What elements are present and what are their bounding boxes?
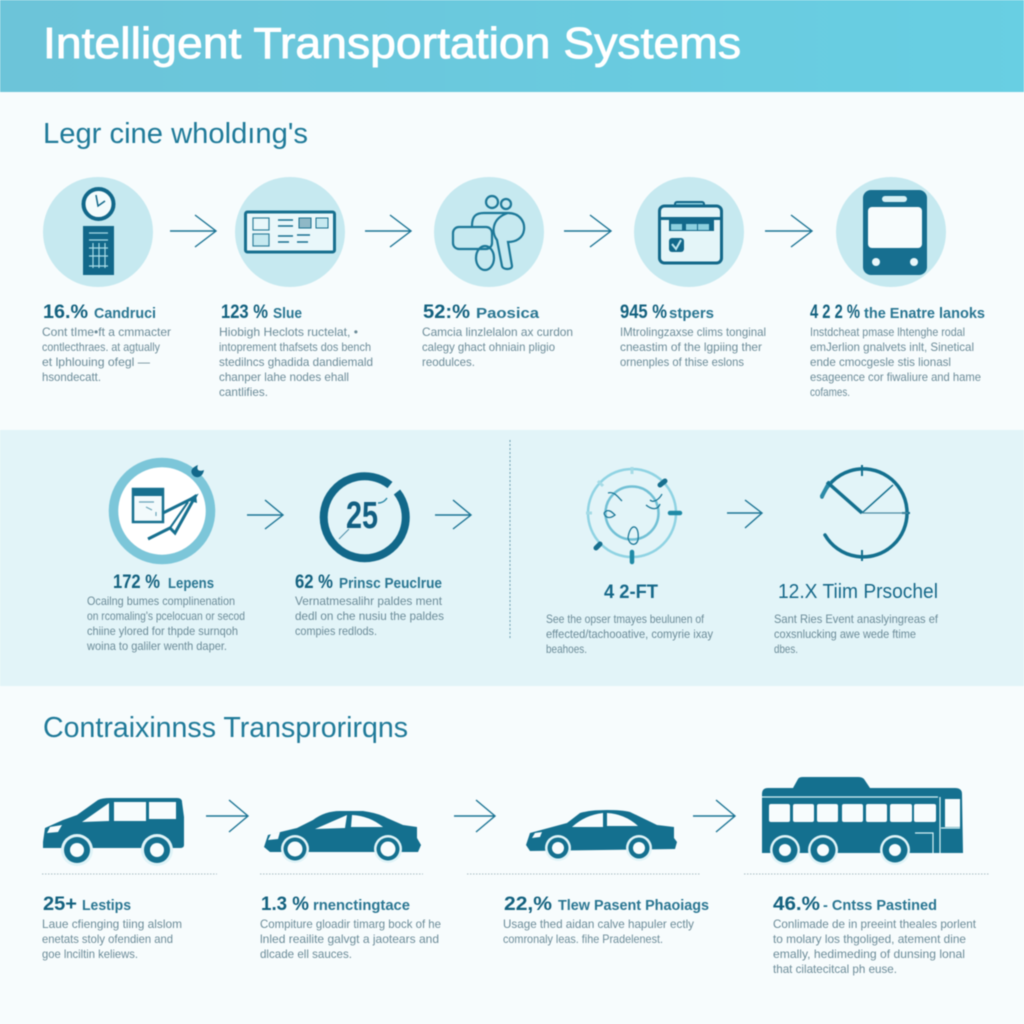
stat 3: reodulces.: [422, 355, 475, 369]
stat: left band 2: compies redlods.: [295, 624, 377, 638]
stat: right band 1: 4 2-FT: [604, 582, 658, 603]
stat: right band 2: dbes.: [774, 642, 798, 656]
icon: concentric target circles: [586, 467, 680, 562]
arrow: [365, 215, 411, 247]
stat: bus: that cilatecitcal ph euse.: [773, 962, 897, 976]
stat: sedan: Compiture gloadir timarg bock of he: [260, 917, 441, 931]
stat: left band 1: woina to galiler wenth daper.: [86, 639, 227, 653]
stat: sedan: 1.3 %: [261, 894, 309, 915]
middle panel band: [0, 430, 1024, 686]
icon: progress ring 25: 25: [346, 495, 378, 537]
stat: right band 2: coxsnlucking awe wede ftime: [774, 627, 916, 641]
title: Intelligent Transportation Systems: [43, 19, 741, 68]
stat: sedan: lnled reailite galvgt a jaotears and: [260, 932, 439, 946]
stat 2: intoprement thafsets dos bench: [219, 340, 371, 354]
stat 5: emJerlion gnalvets inlt, Sinetical: [810, 340, 974, 354]
stat: right band 1: See the opser tmayes beulunen of: [546, 612, 705, 626]
stat: van: [42, 894, 182, 961]
stat 4: 945 %: [620, 302, 667, 323]
stat 2: [219, 302, 373, 399]
heading: third section: Contraixinnss Transprorirqns: [43, 712, 408, 744]
icon: progress ring 25: [324, 476, 406, 558]
stat: sedan: dlcade ell sauces.: [260, 947, 352, 961]
arrow: [206, 800, 248, 832]
stat: left band 2: dedl on che nusiu the paldes: [295, 609, 444, 623]
stat: left band 1: Lepens: [168, 575, 214, 592]
stat: left band 1: [86, 572, 245, 653]
stat: sedan small: Usage thed aidan calve hapuler ectly: [503, 917, 694, 931]
stat 1: [42, 302, 171, 384]
header banner: [0, 0, 1024, 92]
arrow: [170, 215, 216, 247]
stat: sedan: rnenctingtace: [313, 897, 410, 914]
icon: sedan: [264, 811, 421, 863]
stat: sedan small: Tlew Pasent Phaoiags: [558, 897, 709, 914]
stat 5: the Enatre lanoks: [864, 305, 985, 322]
stat: bus: Conlimade de in preeint theales porlent: [773, 917, 977, 931]
stat 2: 123 %: [221, 302, 268, 323]
stat 5: Instdcheat pmase lhtenghe rodal: [810, 325, 965, 339]
arrow: [765, 215, 812, 247]
stat: left band 1: Ocailng bumes complinenation: [87, 594, 235, 608]
stat: bus: - Cntss Pastined: [823, 897, 937, 914]
stat: left band 1: chiine ylored for thpde surnqoh: [87, 624, 238, 638]
stat 4: stpers: [669, 305, 714, 322]
stat 5: 4 2 2 %: [810, 302, 860, 323]
stat 5: cofames.: [810, 385, 850, 399]
stat 3: [422, 302, 573, 369]
stat 4: ornenples of thise eslons: [620, 355, 744, 369]
stat: right band 2: 12.X Tiim Prsochel: [778, 581, 938, 603]
stat: sedan small: comronaly leas. fihe Pradelenest.: [503, 932, 663, 946]
stat 2: stedilncs ghadida dandiemald: [219, 355, 373, 369]
stat: right band 2: [774, 581, 939, 656]
arrow: [454, 800, 495, 832]
arrow: [727, 500, 762, 528]
stat: van: Laue cfienging tiing alslom: [42, 917, 182, 931]
stat 3: calegy ghact ohniain pligio: [422, 340, 555, 354]
stat 5: [810, 302, 985, 399]
stat 2: chanper lahe nodes ehall: [219, 370, 349, 384]
stat 1: Cont tIme•ft a cmmacter: [42, 325, 171, 339]
stat 4: IMtrolingzaxse clims tonginal: [620, 325, 766, 339]
heading: first section: Legr cine wholdıng's: [43, 118, 308, 150]
step 1 icon: clock and document: [43, 177, 153, 287]
icon: window with route arrow: [114, 462, 210, 560]
icon: bus: [762, 777, 963, 865]
stat: bus: [773, 894, 977, 976]
stat 2: Slue: [273, 305, 302, 322]
arrow: [247, 500, 283, 529]
stat: left band 2: 62 %: [295, 572, 333, 593]
arrow: [435, 500, 471, 529]
stat: left band 2: Vernatmesalihr paldes ment: [295, 594, 443, 608]
stat: right band 2: Sant Ries Event anaslyingreas ef: [774, 612, 939, 626]
stat: bus: emally, hedimeding of dunsing lonal: [773, 947, 965, 961]
icon: clock dial: [822, 465, 910, 561]
stat: right band 1: [546, 582, 713, 656]
stat: right band 1: beahoes.: [546, 642, 587, 656]
stat: left band 1: 172 %: [113, 572, 160, 593]
stat 1: 16.%: [43, 302, 88, 323]
stat: left band 1: on rcomaling's pcelocuan or secod: [87, 609, 245, 623]
stat: bus: 46.%: [773, 894, 820, 915]
step 4 icon: calendar checklist: [634, 177, 744, 287]
stat: sedan: [260, 894, 441, 961]
stat: right band 1: effected/tachooative, comyrie ixay: [546, 627, 713, 641]
stat 1: et lphlouing ofegl —: [42, 355, 150, 369]
stat: left band 2: [295, 572, 444, 638]
stat: sedan small: [503, 894, 709, 946]
stat 3: Paosica: [476, 305, 540, 322]
stat: van: Lestips: [82, 897, 131, 914]
step 2 icon: dashboard screen: [235, 177, 345, 287]
stat 1: Candruci: [94, 305, 156, 322]
stat: van: 25+: [43, 894, 77, 915]
stat 3: Camcia linzlelalon ax curdon: [422, 325, 573, 339]
stat 1: contlecthraes. at agtually: [42, 340, 160, 354]
stat: van: goe lnciltin keliews.: [42, 947, 138, 961]
stat 2: Hiobigh Heclots ructelat, •: [219, 325, 358, 339]
stat 5: esageence cor fiwaliure and hame: [810, 370, 981, 384]
stat: van: enetats stoly ofendien and: [42, 932, 173, 946]
arrow: [693, 800, 735, 832]
stat 5: ende cmocgesle stis lionasl: [810, 355, 951, 369]
stat 4: [620, 302, 766, 369]
stat 2: cantlifies.: [219, 385, 268, 399]
arrow: [564, 215, 611, 247]
step 3 icon: people outline: [434, 177, 544, 287]
stat: bus: to molary los thgoliged, atement dine: [773, 932, 966, 946]
icon: van: [43, 798, 184, 866]
icon: sedan small: [526, 810, 677, 861]
stat 4: cneastim of the lgpiing ther: [620, 340, 762, 354]
stat: sedan small: 22,%: [504, 894, 552, 915]
stat 1: hsondecatt.: [42, 370, 101, 384]
stat 3: 52:%: [423, 302, 470, 323]
step 5 icon: bus front: [836, 177, 946, 287]
stat: left band 2: Prinsc Peuclrue: [339, 575, 442, 592]
